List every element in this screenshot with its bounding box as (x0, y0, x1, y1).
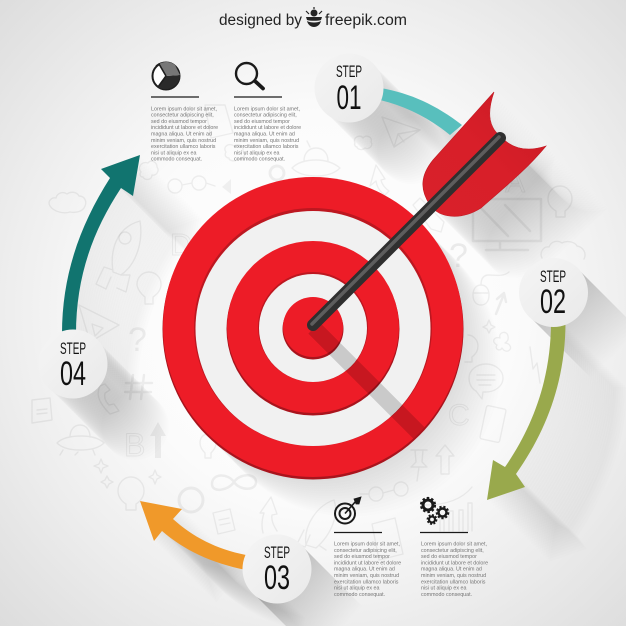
lorem text: Lorem ipsum dolor sit amet, (334, 542, 400, 548)
dart arrow (312, 92, 546, 325)
arrow shadow on target (314, 328, 425, 439)
doodle: hash (125, 375, 152, 399)
doodle: pencil (413, 198, 444, 232)
lorem text: exercitation ullamco laboris (334, 579, 399, 585)
doodle: glasses lower (360, 482, 408, 501)
doodle: triangle marker (222, 179, 231, 194)
step 03 badge: STEP (264, 543, 290, 562)
panel: top left text block (151, 62, 218, 163)
doodle: document left (32, 398, 52, 423)
header credit (219, 7, 407, 29)
doodle: bulb right top (548, 186, 572, 217)
step 02 badge: 02 (540, 283, 566, 321)
doodle: brain right (541, 241, 585, 259)
doodle: glasses upper (168, 176, 215, 193)
doodle: letter C: C (448, 399, 470, 432)
lorem text: consectetur adipiscing elit, (151, 113, 214, 119)
doodle: star right (483, 320, 495, 333)
doodle: bar chart (425, 487, 472, 531)
arrow: step 1 teal arc (380, 88, 462, 135)
doodle: cloud (354, 136, 372, 150)
lorem text: sed do eiusmod tempor (151, 119, 207, 125)
background doodles (32, 105, 585, 560)
lorem text: magna aliqua. Ut enim ad (421, 567, 482, 573)
doodle: coin (179, 488, 203, 512)
lorem text: exercitation ullamco laboris (234, 144, 299, 150)
lorem text: commodo consequat. (421, 592, 472, 598)
header credit: designed by (219, 12, 302, 29)
lorem text: sed do eiusmod tempor (234, 119, 290, 125)
step 01 badge: STEP (336, 62, 362, 81)
step 04 badge: STEP (60, 339, 86, 358)
doodle: clover (494, 332, 511, 351)
doodle: gear (270, 166, 284, 180)
doodle: set square (79, 305, 119, 342)
doodle: curved up arrow (260, 497, 277, 533)
doodle: flying saucer left (57, 425, 104, 455)
doodle: bulb centre-left (200, 434, 216, 458)
doodle: bulb right of target (465, 335, 478, 362)
lorem text: consectetur adipiscing elit, (234, 113, 297, 119)
doodle: bulb upper (137, 272, 161, 304)
lorem text: commodo consequat. (334, 592, 385, 598)
doodle: bulb lower (118, 477, 144, 510)
doodle: clipboard lower (372, 518, 403, 560)
doodle: rocket (96, 221, 141, 292)
lorem text: minim veniam, quis nostrud (334, 573, 399, 579)
step 01 badge: 01 (336, 79, 362, 117)
doodle: cloud small (225, 145, 245, 161)
doodle: up arrow solid (150, 422, 166, 458)
icon: freepik logo (306, 7, 322, 27)
doodle: infinity (212, 475, 256, 490)
doodle: letter D: D (170, 227, 192, 262)
lorem text: incididunt ut labore et dolore (421, 560, 488, 566)
lorem text: nisi ut aliquip ex ea (151, 150, 196, 156)
shaft (313, 138, 500, 325)
lorem text: incididunt ut labore et dolore (151, 125, 218, 131)
lorem text: magna aliqua. Ut enim ad (334, 567, 395, 573)
lorem text: incididunt ut labore et dolore (334, 560, 401, 566)
icon: target with dart (335, 497, 361, 524)
doodle: up arrow outline (436, 445, 454, 474)
lorem text: minim veniam, quis nostrud (421, 573, 486, 579)
doodle: letter A: A (505, 166, 525, 199)
lorem text: exercitation ullamco laboris (151, 144, 216, 150)
step 02 badge: STEP (540, 267, 566, 286)
icon: magnifier (236, 63, 263, 88)
doodle: arrow right (496, 293, 506, 314)
arrow: step 3 orange arrow (140, 501, 246, 570)
lorem text: nisi ut aliquip ex ea (234, 150, 279, 156)
panel: bottom right text block (420, 498, 488, 598)
doodle: clipboard top (205, 105, 233, 138)
step 02 badge (519, 258, 588, 327)
lorem text: commodo consequat. (234, 157, 285, 163)
step 03 badge (242, 534, 312, 604)
step 04 badge: 04 (60, 355, 86, 393)
doodle: telephone (98, 384, 119, 414)
doodle: sparkles (94, 459, 161, 488)
header credit: freepik.com (325, 12, 407, 29)
arrow: step 4 dark teal arrow (62, 155, 140, 334)
doodle: mouse (473, 272, 509, 305)
lorem text: incididunt ut labore et dolore (234, 125, 301, 131)
lorem text: Lorem ipsum dolor sit amet, (234, 106, 300, 112)
doodle: rocket window (119, 232, 131, 244)
doodle: trend arrow (530, 347, 540, 383)
lorem text: Lorem ipsum dolor sit amet, (421, 542, 487, 548)
lorem text: consectetur adipiscing elit, (421, 548, 484, 554)
lorem text (234, 106, 301, 163)
doodle: cloud mid (140, 161, 158, 179)
doodle: rocket lower (297, 500, 336, 550)
doodle: speech bubble (469, 364, 503, 399)
lorem text (334, 542, 401, 598)
lorem text: Lorem ipsum dolor sit amet, (151, 106, 217, 112)
step 04 badge (38, 330, 108, 398)
doodle: paper plane (382, 117, 420, 147)
lorem text: minim veniam, quis nostrud (151, 138, 216, 144)
doodle: tablet (480, 405, 506, 443)
bullseye target (162, 177, 464, 480)
panel: top middle text block (234, 63, 301, 163)
lorem text: sed do eiusmod tempor (334, 554, 390, 560)
icon: pie chart (152, 62, 180, 90)
doodle: document lower (213, 509, 235, 534)
lorem text: sed do eiusmod tempor (421, 554, 477, 560)
lorem text: nisi ut aliquip ex ea (334, 586, 379, 592)
lorem text: magna aliqua. Ut enim ad (234, 132, 295, 138)
doodle: up arrow (370, 165, 389, 195)
doodle: brain left (49, 192, 86, 213)
step 01 badge (314, 54, 384, 122)
lorem text: consectetur adipiscing elit, (334, 548, 397, 554)
doodle: pin (411, 450, 427, 481)
arrow: step 2 olive arrow (487, 322, 566, 500)
lorem text (421, 542, 488, 598)
lorem text: minim veniam, quis nostrud (234, 138, 299, 144)
step 03 badge: 03 (264, 559, 290, 597)
lorem text: commodo consequat. (151, 157, 202, 163)
lorem text: exercitation ullamco laboris (421, 579, 486, 585)
doodle: question mark: ? (128, 321, 147, 359)
lorem text: magna aliqua. Ut enim ad (151, 132, 212, 138)
doodle: monitor (473, 199, 541, 250)
panel: bottom left text block (334, 497, 401, 598)
lorem text: nisi ut aliquip ex ea (421, 586, 466, 592)
fletching (423, 92, 546, 216)
doodle: flying saucer top (292, 141, 340, 176)
icon: gears (421, 498, 448, 524)
lorem text (151, 106, 218, 163)
doodle: question mark right: ? (449, 237, 468, 275)
doodle: letter B: B (124, 427, 145, 463)
